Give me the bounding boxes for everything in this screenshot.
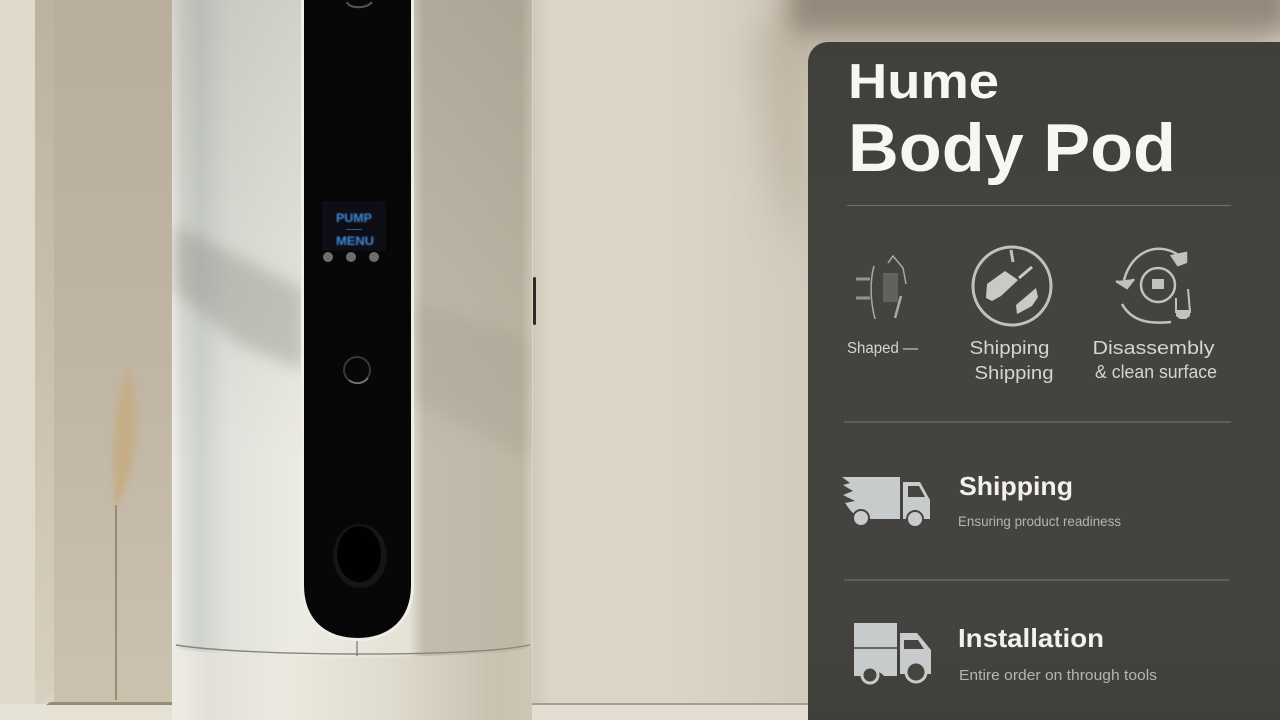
title: Body Pod xyxy=(848,110,1176,186)
label: second feature: Shipping xyxy=(974,363,1054,383)
title xyxy=(848,55,1176,186)
label: second feature: Shipping xyxy=(969,338,1049,358)
description: shipping: Ensuring product readiness xyxy=(958,513,1121,529)
product: body pod tower xyxy=(172,0,536,720)
icon: shipping truck xyxy=(842,477,930,527)
heading: shipping: Shipping xyxy=(959,471,1073,501)
decorative dried reed xyxy=(113,366,137,700)
title: Hume xyxy=(848,55,999,109)
base seam xyxy=(176,645,530,654)
side button xyxy=(533,277,536,325)
icon: body diagram xyxy=(856,256,906,319)
icon: installation truck xyxy=(854,623,931,683)
black control strip xyxy=(304,0,411,638)
pod base xyxy=(172,648,532,720)
blue display xyxy=(322,201,386,251)
top sensor xyxy=(347,2,372,7)
icon: no tools circle xyxy=(973,247,1051,325)
heading: installation: Installation xyxy=(958,623,1104,653)
blue display: PUMP xyxy=(336,211,372,225)
lower sensor xyxy=(333,524,387,588)
label: third feature: & clean surface xyxy=(1095,362,1217,382)
blue display: MENU xyxy=(336,234,374,248)
round dial xyxy=(344,357,370,383)
info panel xyxy=(808,42,1280,720)
description: installation: Entire order on through tools xyxy=(959,668,1157,684)
icon: recycle loop xyxy=(1116,249,1190,323)
pod cylinder body xyxy=(172,0,532,658)
diagonal light shadow xyxy=(175,225,304,370)
display buttons xyxy=(323,252,379,262)
label: third feature: Disassembly xyxy=(1092,338,1214,358)
label: first feature: Shaped — xyxy=(847,340,918,357)
row: shipping xyxy=(842,471,1121,529)
row: installation xyxy=(854,623,1157,684)
